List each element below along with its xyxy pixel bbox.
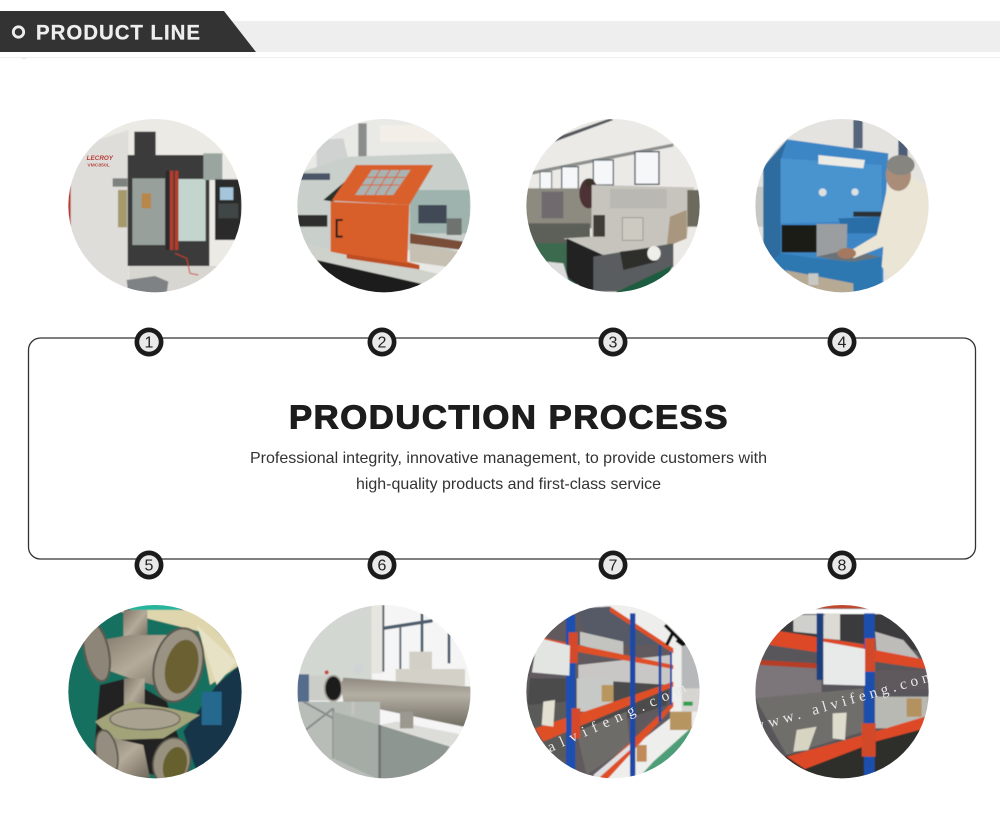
heading: product line: PRODUCT LINE xyxy=(36,22,201,44)
photo 3: workshop turning machine xyxy=(525,117,702,297)
photo 1: vertical machining centre xyxy=(67,117,243,297)
step badge 6: 6 xyxy=(378,558,387,574)
step badge 3: 3 xyxy=(609,334,618,352)
step badge 4: 4 xyxy=(838,334,847,352)
subtitle: high-quality products and first-class service xyxy=(356,476,661,493)
step badge 7: 7 xyxy=(609,558,618,574)
step badge 5: 5 xyxy=(145,558,154,574)
step badge 2 xyxy=(368,328,396,356)
step badge 4 xyxy=(828,328,856,356)
photo 1: vertical machining centre: VMC850L xyxy=(87,162,110,168)
step badge 5 xyxy=(134,550,164,580)
step badge 8: 8 xyxy=(838,558,847,574)
photo 5: stainless steel cross fitting xyxy=(67,603,243,789)
subtitle: Professional integrity, innovative management, to provide customers with xyxy=(250,450,767,467)
photo 7: warehouse shelves xyxy=(525,603,702,780)
watermark text: www. alvifeng.com xyxy=(751,668,936,736)
step badge 6 xyxy=(368,550,396,580)
central rounded panel xyxy=(28,338,976,559)
photo 8: warehouse shelves close up xyxy=(751,603,936,780)
photo 4: operator at blue machine xyxy=(755,117,932,297)
icon: header ring xyxy=(13,27,24,37)
photo 6: large steel pipe in factory xyxy=(297,603,473,780)
header band xyxy=(0,11,1000,60)
step badge 8 xyxy=(828,550,856,580)
step badge 1: 1 xyxy=(145,334,154,352)
watermark text: alvifeng.com xyxy=(545,679,689,756)
step badge 2: 2 xyxy=(378,334,387,352)
photo 2: orange lathe xyxy=(297,117,473,297)
title: PRODUCTION PROCESS xyxy=(289,398,729,436)
step badge 3 xyxy=(598,328,628,356)
machine brand text: LECROY xyxy=(87,155,114,162)
step badge 1 xyxy=(134,328,164,356)
step badge 7 xyxy=(598,550,628,580)
